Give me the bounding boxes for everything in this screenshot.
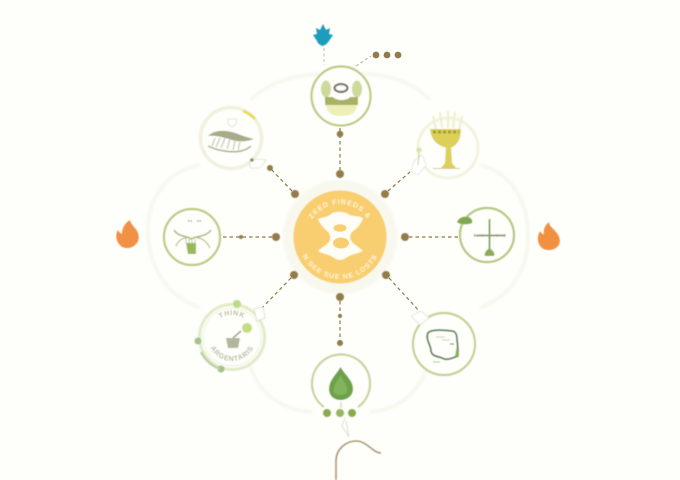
badge emblem — [318, 212, 363, 260]
node: right cross — [457, 208, 514, 262]
badge text: ZEED FINEDS & — [308, 198, 370, 220]
node: bottom left seal — [194, 299, 266, 373]
dots connector — [356, 56, 371, 66]
node: top left feather — [200, 108, 266, 168]
icon: left orange flame — [116, 220, 139, 248]
node: bottom left seal: THINK — [218, 310, 245, 318]
icon: blue leaf flame — [313, 24, 333, 46]
node: bottom right map — [411, 311, 475, 375]
central badge — [284, 180, 396, 293]
node: left branch and plant — [164, 209, 220, 265]
badge text: N SEE SUE NE LOSTS — [302, 254, 377, 280]
node: top right chalice — [411, 111, 478, 178]
badge text — [302, 198, 377, 280]
node: top device — [312, 66, 370, 126]
blue flame connector — [323, 48, 325, 65]
three brown dots — [373, 52, 401, 58]
node dots — [239, 131, 409, 346]
connector lines — [222, 128, 458, 345]
node: bottom water drop — [312, 355, 370, 437]
curved hook line — [336, 441, 381, 480]
node: bottom left seal: ARGENTARIS — [210, 346, 253, 362]
icon: right orange flame — [538, 222, 560, 250]
